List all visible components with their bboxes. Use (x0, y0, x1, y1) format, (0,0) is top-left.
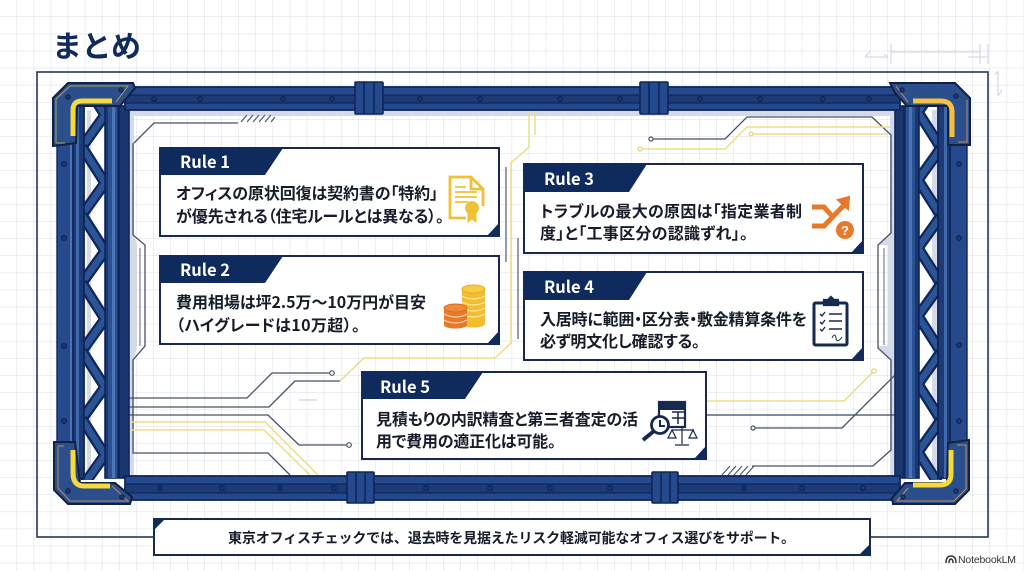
icon: calculator, magnifier, scale (643, 402, 697, 445)
icon: shuffle with question (812, 197, 854, 239)
beam clips (347, 82, 678, 503)
panel: Rule 1: Rule 1 (180, 149, 230, 173)
corner: top right (890, 83, 970, 145)
corner: bottom left (54, 442, 132, 504)
bottom message band (154, 519, 870, 555)
panel: Rule 4 (524, 272, 863, 360)
icon: clipboard (814, 297, 847, 345)
steel frame (53, 79, 970, 504)
panel: Rule 4: Rule 4 (544, 274, 594, 298)
icon: coins (444, 285, 485, 328)
icon: shuffle with question: ? (841, 223, 849, 238)
panel: Rule 1: オフィスの原状回復は契約書の「特約」 (176, 180, 438, 204)
panel: Rule 1: が優先される（住宅ルールとは異なる）。 (176, 203, 444, 227)
panel: Rule 3: トラブルの最大の原因は「指定業者制 (540, 198, 802, 222)
corner: top left (53, 83, 135, 146)
corner: bottom right (892, 440, 969, 504)
panel: Rule 2: （ハイグレードは10万超）。 (176, 312, 360, 336)
frame shade (129, 110, 896, 476)
icon: certificate (450, 177, 483, 222)
right column (895, 80, 967, 488)
panel: Rule 2 (160, 256, 499, 344)
watermark: NotebookLM: NotebookLM (958, 554, 1016, 566)
panel: Rule 3 (524, 164, 863, 253)
panel: Rule 2: 費用相場は坪2.5万～10万円が目安 (176, 289, 426, 313)
left column (57, 79, 129, 487)
dimension marks (865, 44, 1002, 96)
panel: Rule 2: Rule 2 (180, 257, 230, 281)
panel: Rule 4: 必ず明文化し確認する。 (540, 328, 700, 352)
panel: Rule 4: 入居時に範囲・区分表・敷金精算条件を (540, 306, 807, 330)
outer border (37, 72, 988, 537)
circuit lines (128, 110, 895, 475)
panel: Rule 5: 用で費用の適正化は可能。 (376, 428, 556, 452)
panel: Rule 1 (160, 148, 499, 236)
bottom message band: 東京オフィスチェックでは、退去時を見据えたリスク軽減可能なオフィス選びをサポート。 (228, 528, 795, 548)
panel: Rule 5: 見積もりの内訳精査と第三者査定の活 (376, 406, 638, 430)
panel: Rule 5: Rule 5 (380, 374, 430, 398)
panel: Rule 5 (362, 372, 706, 459)
panel: Rule 3: Rule 3 (544, 166, 594, 190)
panel: Rule 3: 度」と「工事区分の認識ずれ」。 (540, 220, 748, 244)
top beam (125, 87, 900, 110)
title: まとめ (52, 22, 141, 66)
bottom beam (125, 476, 900, 500)
